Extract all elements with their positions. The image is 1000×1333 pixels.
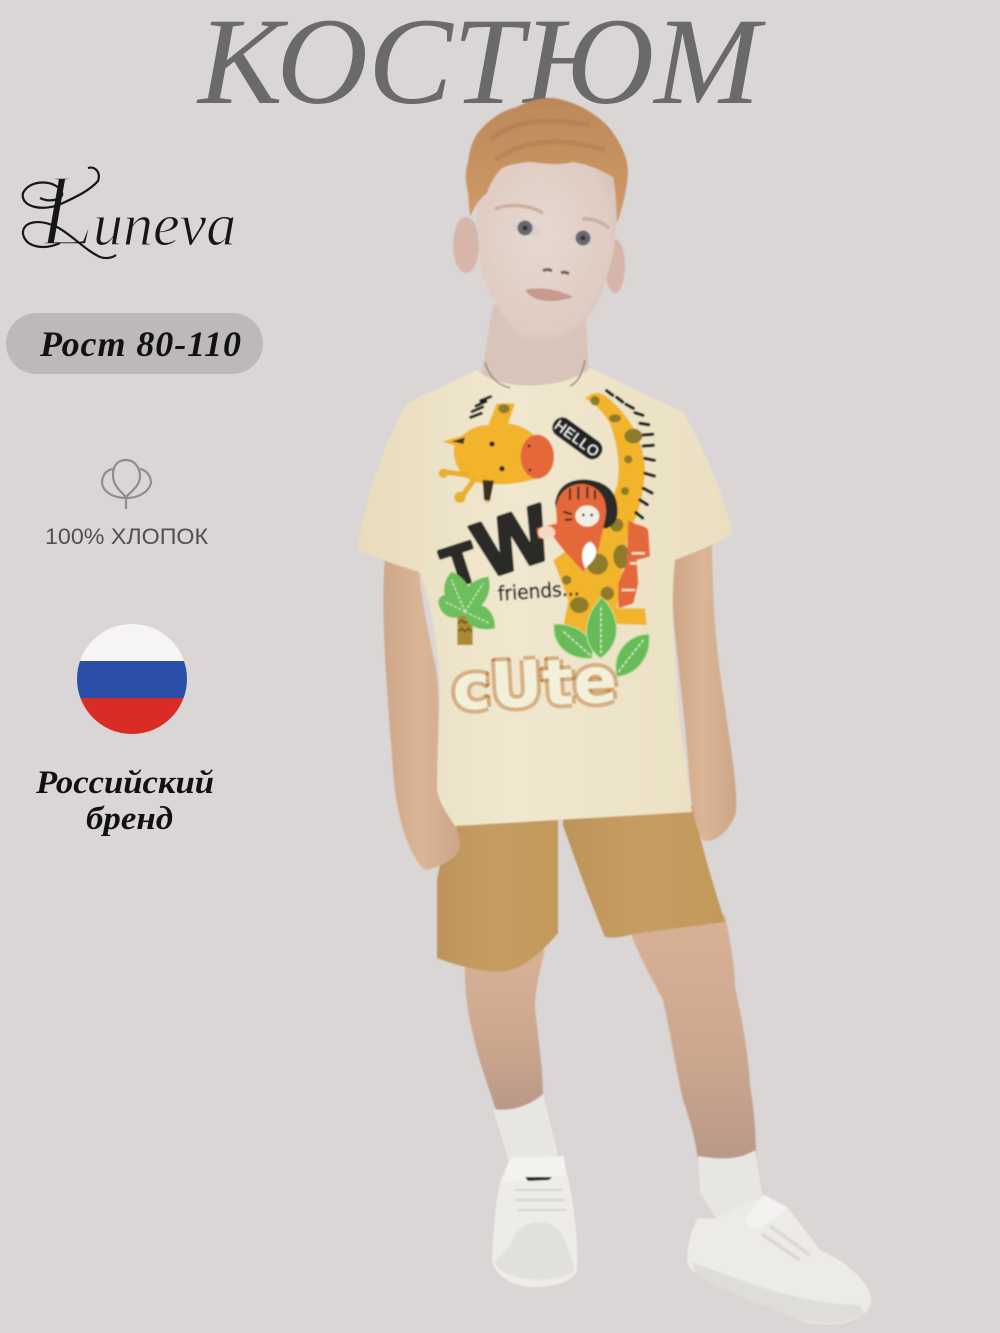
ears <box>453 217 625 293</box>
icon: russian flag <box>77 624 187 734</box>
cotton badge <box>45 460 208 549</box>
cotton label: 100% ХЛОПОК <box>45 524 208 549</box>
face <box>453 98 628 342</box>
brand logo <box>23 153 236 268</box>
speech bubble: HELLO <box>551 418 602 461</box>
boy figure <box>357 98 871 1324</box>
giraffe neck and body <box>553 391 654 642</box>
icon: cotton <box>102 460 151 509</box>
hair <box>466 98 628 223</box>
left arm <box>383 555 460 870</box>
brand origin text: бренд <box>86 801 173 837</box>
cute lettering: cUte <box>450 642 619 725</box>
eyes <box>511 220 598 246</box>
green leaves <box>554 597 649 677</box>
mouth <box>525 288 573 301</box>
nose <box>543 270 569 274</box>
right shoe <box>687 1195 871 1324</box>
shirt print <box>435 391 654 725</box>
giraffe head <box>439 397 554 503</box>
left shoe <box>492 1156 577 1287</box>
legs <box>465 915 756 1160</box>
shorts <box>437 805 725 972</box>
tiger <box>537 479 650 608</box>
necklace <box>485 360 585 388</box>
brand logo: uneva <box>93 192 236 258</box>
brand logo: L <box>36 153 96 268</box>
brand origin text: Российский <box>35 765 214 801</box>
friends text: friends... <box>497 576 580 606</box>
t-shirt <box>357 368 733 826</box>
right arm <box>672 535 736 841</box>
size badge <box>6 313 263 374</box>
TW lettering: W <box>464 488 562 594</box>
socks <box>493 1094 762 1220</box>
brand origin text <box>35 765 214 837</box>
size badge: Рост 80-110 <box>39 324 241 364</box>
palm tree <box>438 572 495 645</box>
neck <box>478 300 590 395</box>
TW lettering: T <box>435 530 486 599</box>
